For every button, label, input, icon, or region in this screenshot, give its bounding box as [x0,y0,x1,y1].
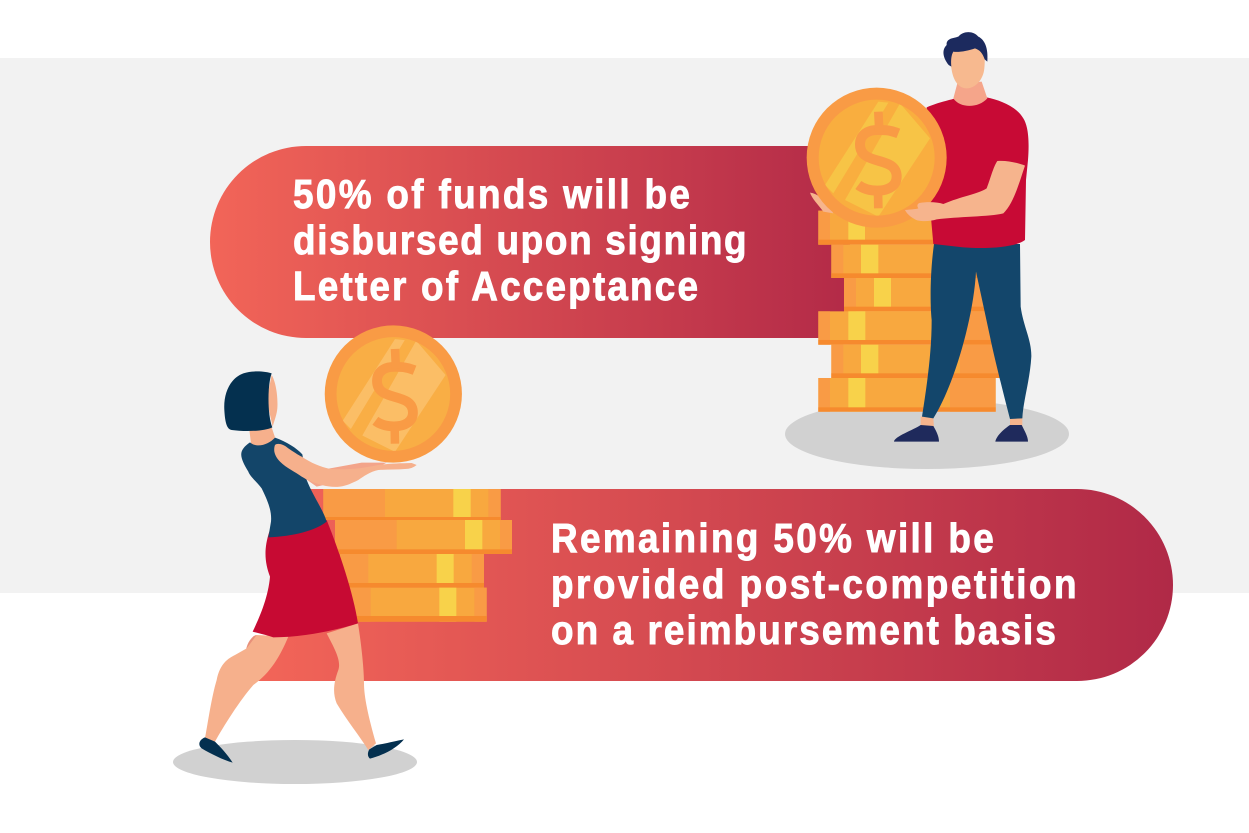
panel: second payment banner [258,489,1173,681]
background band [0,58,1249,593]
text: second payment: Remaining 50% will be [551,516,994,561]
text: first payment: Letter of Acceptance [293,264,698,309]
man forearm and hand [905,161,1025,221]
icon: large dollar coin held by man [807,88,947,228]
illustration: woman with coin stack [199,325,512,763]
icon: large dollar coin held by woman [325,325,462,463]
woman figure [199,371,417,763]
text: first payment: 50% of funds will be [293,172,690,217]
text: first payment [293,172,747,309]
woman ground shadow [173,740,417,784]
man figure [810,32,1031,442]
man ground shadow [785,399,1069,469]
banner shape [210,146,850,338]
coin stack: woman [323,489,512,622]
illustration: man with coin stack [807,32,1031,442]
text: second payment: provided post-competition [551,562,1077,607]
text: second payment [551,516,1077,653]
coin stack: man [818,211,1020,412]
banner shape [258,489,1173,681]
text: second payment: on a reimbursement basis [551,608,1056,653]
panel: first payment banner [210,146,850,338]
text: first payment: disbursed upon signing [293,218,747,263]
